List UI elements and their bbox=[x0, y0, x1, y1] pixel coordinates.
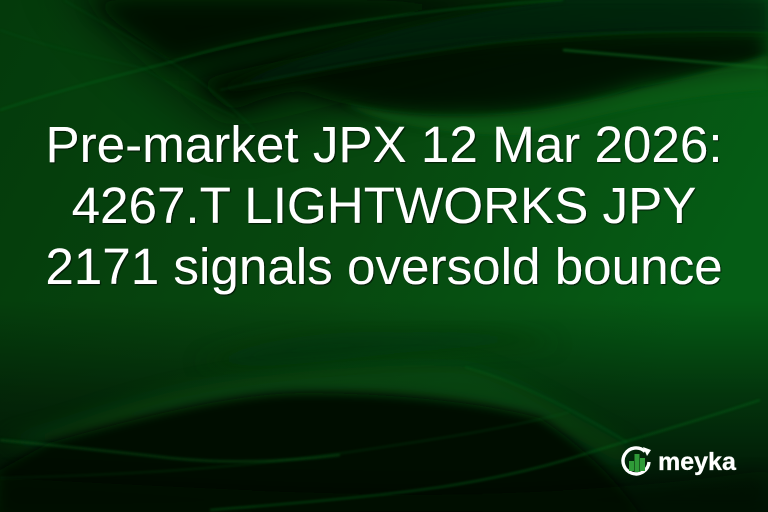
title bbox=[45, 116, 723, 295]
logo: meyka bbox=[623, 447, 737, 476]
icon: ring with bars bbox=[623, 447, 651, 474]
title: 2171 signals oversold bounce bbox=[45, 238, 723, 295]
wordmark: meyka bbox=[658, 448, 737, 476]
title: 4267.T LIGHTWORKS JPY bbox=[72, 177, 696, 234]
title: Pre-market JPX 12 Mar 2026: bbox=[45, 116, 723, 173]
